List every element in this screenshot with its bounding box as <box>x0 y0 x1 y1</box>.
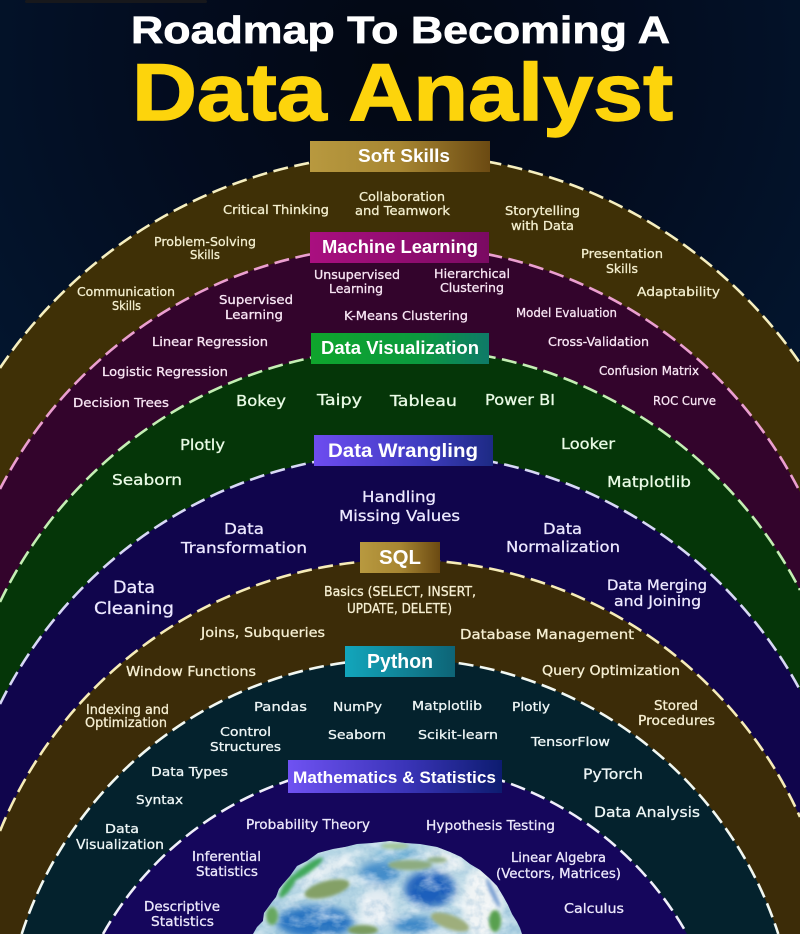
item: inferential statistics: Statistics <box>196 865 258 880</box>
item: inferential statistics <box>192 850 261 880</box>
item: seaborn: Seaborn <box>112 471 182 489</box>
item: supervised: Supervised <box>219 293 293 307</box>
heading: data wrangling <box>314 435 493 466</box>
item: data cleaning: Cleaning <box>94 599 174 619</box>
item: handling missing values <box>339 488 460 525</box>
item: joins: Joins, Subqueries <box>200 626 325 641</box>
item: cross validation: Cross-Validation <box>548 335 649 349</box>
item: data normalization: Data <box>543 520 582 538</box>
item: presentation: Presentation <box>581 246 663 261</box>
item: handling missing values: Handling <box>362 488 436 506</box>
item: matplotlib: Matplotlib <box>412 698 482 713</box>
item: adaptability: Adaptability <box>637 284 721 299</box>
item: indexing and optimization: Optimization <box>85 716 167 731</box>
item: storytelling: Storytelling <box>505 203 580 218</box>
item: stored procedures: Stored <box>654 699 698 714</box>
heading: sql: SQL <box>379 547 421 569</box>
panel: sql <box>0 542 800 934</box>
item: linear algebra <box>496 851 621 882</box>
item: hierarchical: Clustering <box>440 281 504 295</box>
item: linear algebra: (Vectors, Matrices) <box>496 867 621 882</box>
item: unsupervised: Unsupervised <box>314 268 400 282</box>
item: data cleaning <box>94 578 174 619</box>
item: collaboration <box>355 189 451 218</box>
item: unsupervised <box>314 268 400 296</box>
item: roc curve: ROC Curve <box>653 394 716 408</box>
title <box>131 10 673 138</box>
panel: mathematics and statistics <box>103 760 687 934</box>
heading: machine learning: Machine Learning <box>322 237 478 257</box>
item: bokey: Bokey <box>236 392 286 410</box>
item: hierarchical <box>434 267 510 295</box>
item: pytorch: PyTorch <box>583 767 643 783</box>
item: problem solving <box>154 234 256 262</box>
item: numpy: NumPy <box>333 699 383 714</box>
heading: data wrangling: Data Wrangling <box>328 441 478 462</box>
item: power bi: Power BI <box>485 391 555 409</box>
item: control structures: Structures <box>210 739 281 754</box>
item: data visualization: Data <box>105 821 139 836</box>
heading: mathematics and statistics: Mathematics & Statistics <box>293 768 496 787</box>
title: Roadmap To Becoming A <box>131 10 670 52</box>
item: logistic regression: Logistic Regression <box>102 365 228 379</box>
panel: data wrangling <box>0 435 800 934</box>
item: descriptive statistics: Statistics <box>151 915 214 930</box>
item: probability theory: Probability Theory <box>246 818 370 833</box>
item: stored procedures: Procedures <box>638 714 715 729</box>
item: storytelling: with Data <box>511 218 574 233</box>
item: collaboration: Collaboration <box>359 189 445 204</box>
item: data merging: Data Merging <box>607 578 707 594</box>
item: decision trees: Decision Trees <box>73 396 169 410</box>
panel: machine learning <box>0 232 800 934</box>
item: confusion matrix: Confusion Matrix <box>599 364 699 378</box>
item: looker: Looker <box>561 435 616 453</box>
item: data visualization: Visualization <box>76 837 164 853</box>
item: plotly: Plotly <box>512 699 551 714</box>
item: indexing and optimization: Indexing and <box>86 703 169 718</box>
item: data transformation: Transformation <box>180 539 307 557</box>
heading: python <box>345 646 455 677</box>
item: problem solving: Problem-Solving <box>154 234 256 249</box>
item: data normalization: Normalization <box>506 538 620 556</box>
heading: mathematics and statistics <box>288 760 502 793</box>
item: descriptive statistics: Descriptive <box>144 900 220 915</box>
item: stored procedures <box>638 699 715 729</box>
item: window functions: Window Functions <box>126 665 256 680</box>
panel: python <box>22 646 778 934</box>
item: taipy: Taipy <box>316 391 362 409</box>
item: data types: Data Types <box>151 764 228 779</box>
item: inferential statistics: Inferential <box>192 850 261 865</box>
item: unsupervised: Learning <box>329 282 383 296</box>
item: seaborn: Seaborn <box>328 727 386 742</box>
heading: python: Python <box>367 651 433 673</box>
heading: machine learning <box>310 232 489 263</box>
heading: data visualization: Data Visualization <box>321 338 479 358</box>
item: plotly: Plotly <box>180 436 225 454</box>
item: control structures <box>210 724 281 754</box>
item: k-means: K-Means Clustering <box>344 309 468 323</box>
item: supervised <box>219 293 293 322</box>
heading: sql <box>360 542 440 573</box>
panel: data visualization <box>0 333 800 934</box>
item: data analysis: Data Analysis <box>594 805 700 821</box>
item: database management: Database Management <box>460 628 634 643</box>
item: tableau: Tableau <box>389 392 457 410</box>
item: presentation <box>581 246 663 276</box>
item: data transformation <box>180 520 307 557</box>
item: critical thinking: Critical Thinking <box>223 202 329 217</box>
item: communication <box>77 284 175 313</box>
item: data transformation: Data <box>224 520 264 538</box>
item: tensorflow: TensorFlow <box>530 734 610 749</box>
item: data merging <box>607 578 707 610</box>
item: problem solving: Skills <box>190 247 220 262</box>
item: handling missing values: Missing Values <box>339 507 460 525</box>
heading: data visualization <box>311 333 489 364</box>
item: presentation: Skills <box>606 261 638 276</box>
item: syntax: Syntax <box>136 792 183 807</box>
item: linear algebra: Linear Algebra <box>511 851 606 866</box>
item: basics <box>324 585 476 617</box>
item: collaboration: and Teamwork <box>355 203 451 218</box>
item: hypothesis testing: Hypothesis Testing <box>426 819 555 834</box>
item: descriptive statistics <box>144 900 220 930</box>
item: storytelling <box>505 203 580 233</box>
item: data merging: and Joining <box>614 594 701 610</box>
item: matplotlib: Matplotlib <box>607 473 691 491</box>
item: hierarchical: Hierarchical <box>434 267 510 281</box>
item: control structures: Control <box>220 724 271 739</box>
item: indexing and optimization <box>85 703 169 731</box>
item: communication: Skills <box>112 298 141 313</box>
item: calculus: Calculus <box>564 902 624 917</box>
item: scikit-learn: Scikit-learn <box>418 727 498 742</box>
item: data cleaning: Data <box>113 578 155 598</box>
item: data normalization <box>506 520 620 556</box>
title: Data Analyst <box>132 48 673 138</box>
heading: soft skills <box>310 141 490 172</box>
item: basics: Basics (SELECT, INSERT, <box>324 585 476 600</box>
item: supervised: Learning <box>225 308 283 322</box>
item: data visualization <box>76 821 164 853</box>
item: model evaluation: Model Evaluation <box>516 306 617 320</box>
item: communication: Communication <box>77 284 175 299</box>
item: query optimization: Query Optimization <box>542 664 680 679</box>
heading: soft skills: Soft Skills <box>358 146 450 166</box>
item: pandas: Pandas <box>254 699 307 714</box>
icon: earth globe <box>250 838 525 934</box>
item: linear regression: Linear Regression <box>152 335 268 349</box>
item: basics: UPDATE, DELETE) <box>347 602 452 617</box>
